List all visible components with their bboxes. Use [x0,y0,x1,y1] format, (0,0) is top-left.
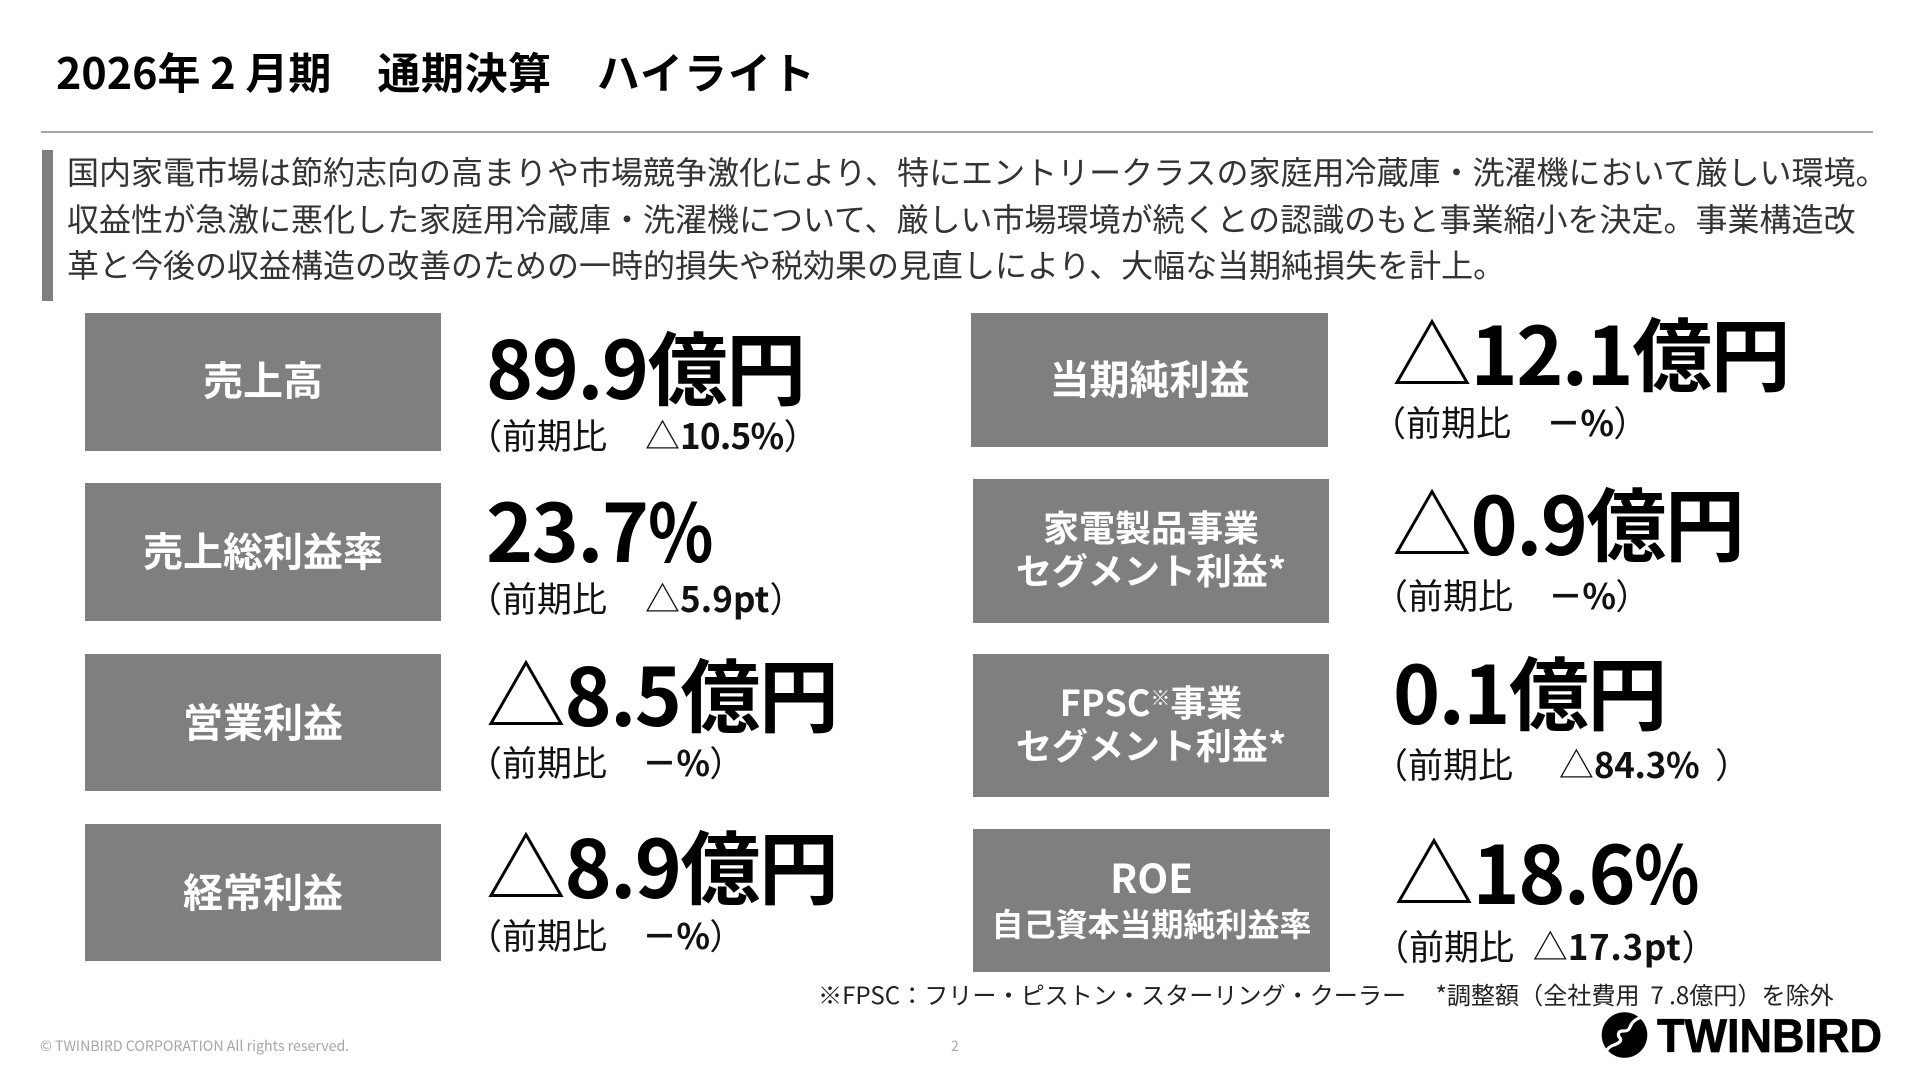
page number: 2 [951,1036,959,1056]
value: 23.7%: 23.7 [486,470,648,586]
label: FPSC事業セグメント利益 [973,654,1329,797]
value: 89.9億円: 89.9億円 [486,307,805,423]
value: △18.6%: △18.6 [1394,812,1634,928]
label: FPSC事業セグメント利益: FPSC※事業 [1060,674,1242,726]
comparison: 前期比: （前期比 △10.5%） [467,409,819,460]
label: ROE 自己資本当期純利益率 [973,829,1330,972]
metric: 売上高 [85,307,819,460]
label: 家電製品事業セグメント利益: セグメント利益* [1016,543,1286,595]
value: 23.7%: % [648,470,712,586]
icon: bird mark [1602,1012,1647,1058]
metric: 家電製品事業セグメント利益 [973,463,1743,623]
comparison: 前期比: （前期比 －%） [1371,396,1648,447]
copyright: © TWINBIRD CORPORATION All rights reserved. [40,1036,349,1056]
label: 当期純利益 [971,313,1328,447]
comparison: 前期比: （前期比 △17.3pt） [1374,920,1717,971]
logo: TWINBIRD [1602,1010,1882,1060]
label: 売上高: 売上高 [203,349,323,407]
label: ROE 自己資本当期純利益率: ROE [1110,847,1193,905]
label: 売上高 [85,313,441,451]
label: 売上総利益率: 売上総利益率 [143,520,383,578]
value: △8.5億円: △8.5億円 [486,634,837,750]
label: 営業利益 [85,654,441,791]
label: 当期純利益: 当期純利益 [1050,348,1250,406]
label: 経常利益: 経常利益 [183,860,343,918]
comparison: 前期比: （前期比 △5.9pt） [467,572,805,623]
label: 経常利益 [85,824,441,961]
label: 売上総利益率 [85,483,441,621]
summary text: 国内家電市場は節約志向の高まりや市場競争激化により、特にエントリークラスの家庭用冷蔵庫・洗濯機において厳しい環境。 収益性が急激に悪化した家庭用冷蔵庫・洗濯機について、厳しい市場環境が続くとの認識のもと事業縮小を決定。事業構造改 革と今後の収益構造の改善のための一時的損失や税効果の見直しにより、大幅な当期純損失を計上。 [67,148,1887,287]
value: △12.1億円: △12.1億円 [1392,293,1789,409]
comparison: 前期比: （前期比 －%） [467,909,744,960]
label: 家電製品事業セグメント利益: 家電製品事業 [1043,500,1259,552]
title: 2026年 2 月期 通期決算 ハイライト [56,40,816,102]
value: △8.9億円: △8.9億円 [486,806,837,922]
footnote: ※FPSC：フリー・ピストン・スターリング・クーラー *調整額（全社費用 7 .8億円）を除外 [818,976,1834,1011]
value: △18.6%: % [1634,812,1698,928]
metric: ROE [973,812,1717,972]
metric: 売上総利益率 [85,470,805,623]
metric: FPSC事業セグメント利益 [973,632,1750,797]
value: △0.9億円: △0.9億円 [1392,463,1743,579]
comparison: 前期比: （前期比 △84.3% ） [1373,738,1750,789]
label: 家電製品事業セグメント利益 [973,479,1329,623]
value: 0.1億円: 0.1億円 [1393,632,1666,748]
label: FPSC事業セグメント利益: セグメント利益* [1016,718,1286,770]
accent bar [42,150,53,301]
comparison: 前期比: （前期比 －%） [467,736,744,787]
metric: 経常利益 [85,806,837,961]
metric: 営業利益 [85,634,837,791]
metric: 当期純利益 [971,293,1789,447]
label: 営業利益: 営業利益 [183,690,343,748]
comparison: 前期比: （前期比 －%） [1373,569,1650,620]
label: ROE 自己資本当期純利益率: 自己資本当期純利益率 [991,900,1312,946]
